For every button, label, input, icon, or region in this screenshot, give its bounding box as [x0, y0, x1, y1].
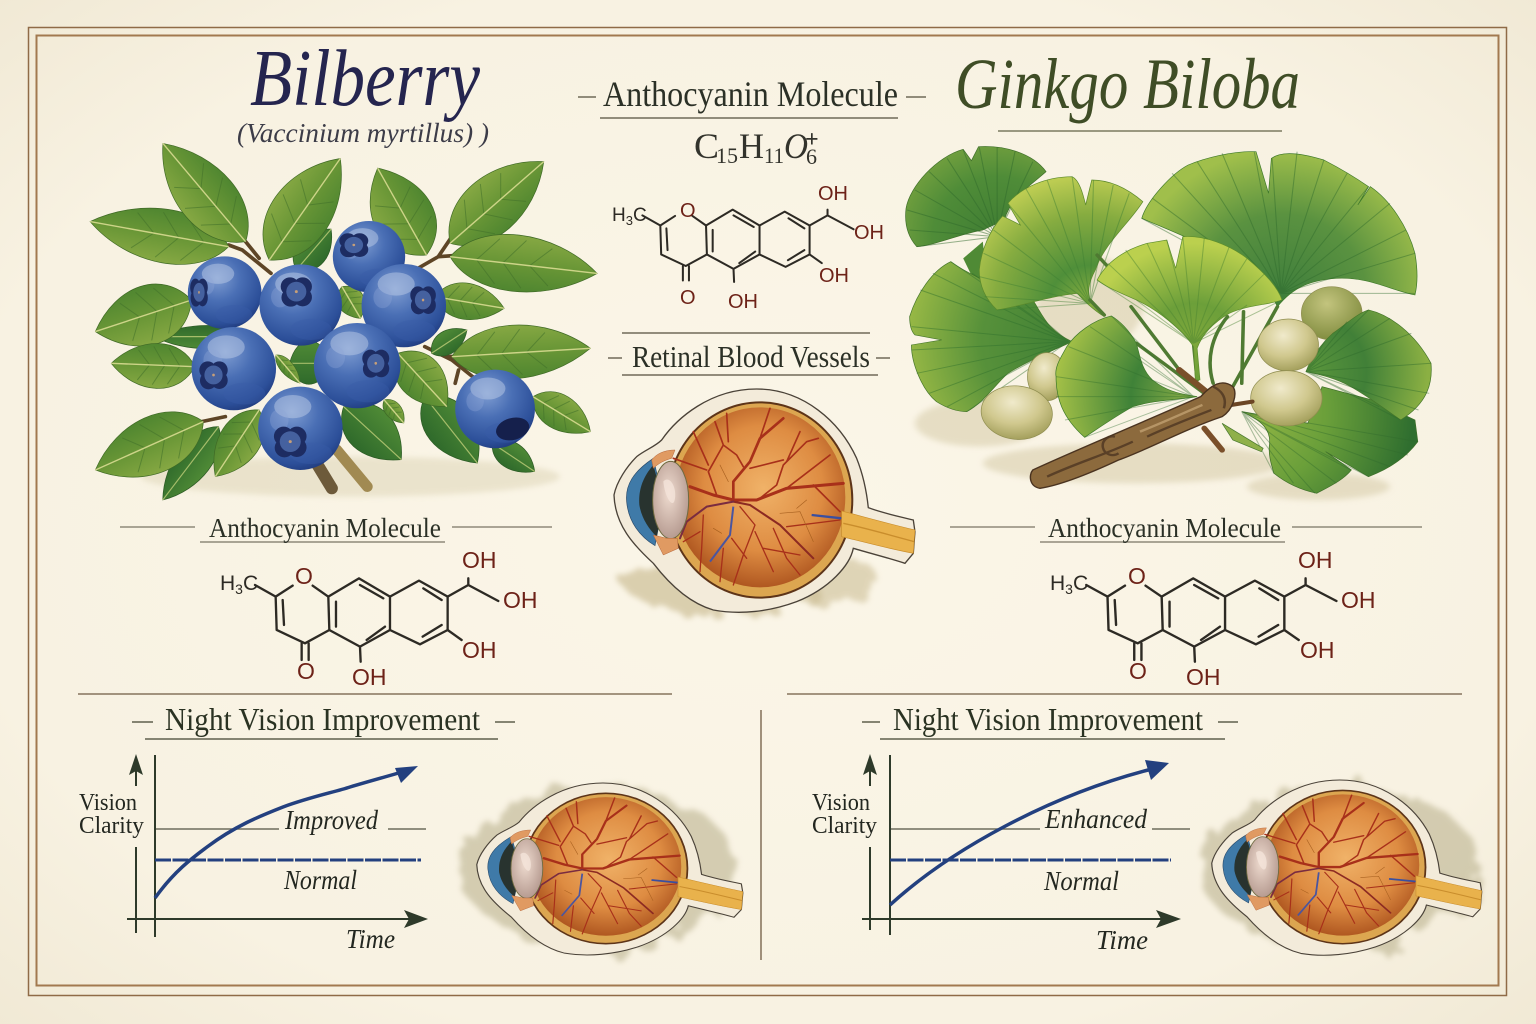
molecule: left: OH — [462, 637, 496, 663]
chart: vision clarity right: Normal — [1043, 866, 1119, 896]
molecule: centre: H — [612, 205, 626, 226]
stems — [1090, 255, 1277, 393]
molecule: centre — [612, 183, 884, 313]
twig — [1030, 370, 1263, 488]
chemical formula: 11 — [764, 143, 784, 168]
molecule: right: C — [1073, 572, 1088, 595]
molecule: left: OH — [462, 547, 496, 573]
chemical formula — [694, 126, 819, 169]
leaf: top middle left — [979, 177, 1143, 317]
molecule: right: OH — [1341, 587, 1376, 613]
leaf: bottom right — [1242, 387, 1418, 493]
molecule: centre: O — [680, 287, 696, 309]
chart: vision clarity right: Time — [1096, 925, 1148, 955]
molecule: centre: O — [680, 200, 696, 222]
heading: right Anthocyanin Molecule — [950, 513, 1422, 543]
molecule: left: H — [220, 572, 235, 595]
leaf: right — [1306, 310, 1431, 420]
molecule: centre: OH — [854, 222, 884, 244]
chart: vision clarity right: Clarity — [812, 813, 877, 839]
chemical formula: + — [805, 127, 819, 153]
molecule: left: C — [243, 572, 258, 595]
molecule: centre: OH — [728, 291, 758, 313]
illustration: small eye left — [460, 783, 743, 955]
nuts: back — [977, 287, 1362, 444]
molecule: right: OH — [1298, 547, 1332, 573]
subtitle: Latin name: (Vaccinium myrtillus) ) — [237, 118, 489, 148]
molecule: left — [220, 547, 538, 690]
leaf: left — [910, 262, 1072, 412]
chart: vision clarity right: Vision — [812, 790, 870, 816]
heading: night vision right: Night Vision Improvement — [893, 701, 1203, 737]
title: Bilberry: Bilberry — [250, 35, 480, 123]
heading: right Anthocyanin Molecule: Anthocyanin Molecule — [1048, 513, 1281, 543]
chart: vision clarity left: Clarity — [79, 813, 144, 839]
illustration: ginkgo branch — [906, 146, 1431, 500]
illustration: large eye cross-section — [614, 389, 915, 613]
leaf: lower centre — [1056, 316, 1197, 437]
chemical formula: 6 — [806, 144, 817, 169]
panel: ginkgo night vision — [812, 701, 1482, 955]
twigs — [202, 237, 479, 488]
leaf: large top right — [1142, 152, 1417, 307]
heading: night vision left: Night Vision Improvement — [165, 701, 480, 737]
chemical formula: O — [784, 126, 808, 166]
panel: bilberry night vision — [79, 701, 743, 955]
molecule: centre: OH — [819, 265, 849, 287]
section rules and divider — [78, 694, 1462, 960]
chart: vision clarity left: Time — [346, 924, 395, 954]
chemical formula: H — [739, 126, 764, 166]
chemical formula: 15 — [716, 143, 738, 168]
illustration: bilberry branch — [84, 126, 601, 511]
molecule: left: O — [297, 658, 315, 684]
molecule: right: OH — [1186, 664, 1220, 690]
illustration: small eye right — [1200, 780, 1482, 955]
chart: vision clarity left: Vision — [79, 790, 137, 816]
leaves — [84, 126, 601, 511]
molecule: right: OH — [1300, 637, 1334, 663]
molecule: right: H — [1050, 572, 1065, 595]
chart: vision clarity right: Enhanced — [1044, 804, 1147, 834]
nuts: front — [1251, 319, 1322, 426]
heading: centre Anthocyanin Molecule: Anthocyanin Molecule — [603, 74, 898, 114]
molecule: left: OH — [503, 587, 538, 613]
leaf: centre — [1097, 236, 1282, 380]
molecule: centre: 3 — [626, 213, 633, 228]
chart: vision clarity left: Improved — [284, 805, 378, 835]
molecule: right: O — [1128, 563, 1146, 589]
molecule: right — [1050, 547, 1376, 690]
chart: vision clarity left — [79, 754, 428, 954]
molecule: right: 3 — [1065, 581, 1073, 597]
leaf: top left — [906, 146, 1046, 247]
molecule: left: 3 — [235, 581, 243, 597]
heading: Retinal Blood Vessels: Retinal Blood Vessels — [632, 339, 870, 374]
chemical formula: C — [694, 126, 719, 166]
molecule: centre: OH — [818, 183, 848, 205]
chart: vision clarity left: Normal — [283, 865, 357, 895]
molecule: centre: C — [633, 205, 647, 226]
heading: left Anthocyanin Molecule: Anthocyanin Molecule — [209, 513, 441, 543]
molecule: left: OH — [352, 664, 386, 690]
molecule: left: O — [295, 563, 313, 589]
molecule: right: O — [1129, 658, 1147, 684]
heading: left Anthocyanin Molecule — [120, 513, 552, 543]
blueberries — [188, 221, 535, 470]
title underline — [998, 130, 1282, 132]
chart: vision clarity right — [812, 754, 1190, 955]
title: Ginkgo Biloba: Ginkgo Biloba — [955, 44, 1300, 124]
